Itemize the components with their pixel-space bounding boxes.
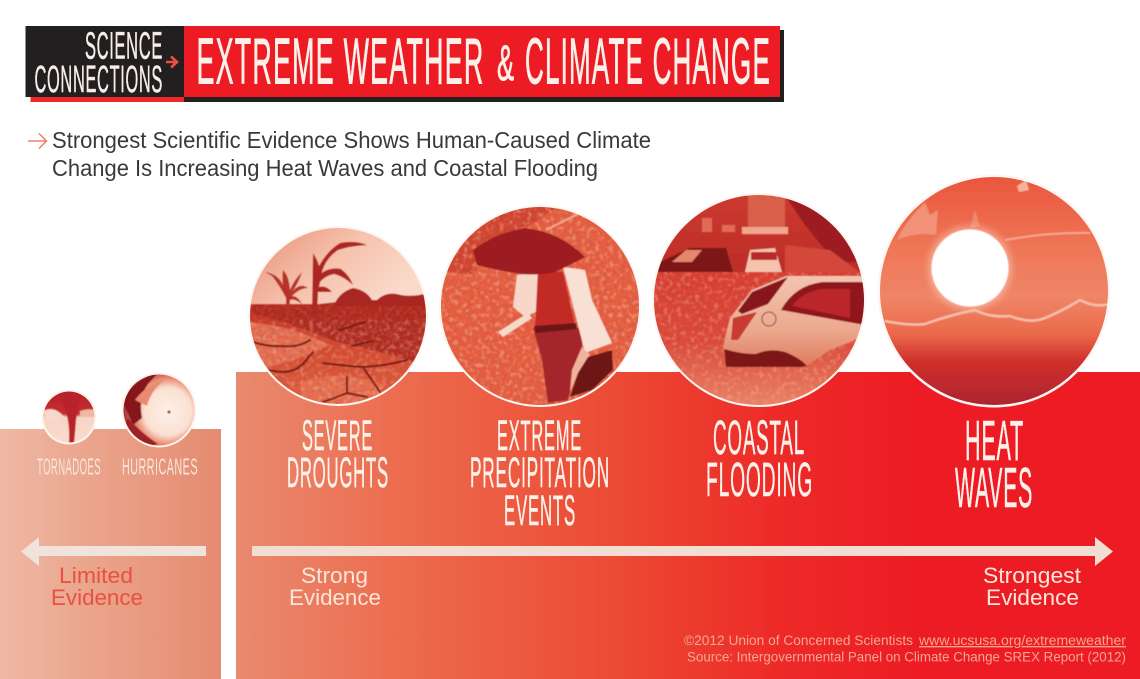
title banner: SCIENCE bbox=[85, 26, 163, 68]
subtitle text: Strongest Scientific Evidence Shows Human-Caused Climate bbox=[52, 127, 651, 153]
car body bbox=[723, 276, 865, 366]
pale cracked earth bbox=[248, 322, 330, 372]
newspaper bbox=[498, 313, 532, 337]
text: strong evidence: Evidence bbox=[289, 585, 381, 610]
photo: coastal flooding bbox=[652, 193, 866, 408]
fuel cap bbox=[762, 312, 776, 326]
bag bbox=[570, 350, 613, 397]
text: limited evidence: Limited bbox=[59, 563, 133, 588]
credits bbox=[684, 633, 1127, 664]
black tag bbox=[26, 26, 184, 97]
horizon bushes bbox=[335, 288, 428, 306]
ground bbox=[250, 303, 414, 404]
credits: www.ucsusa.org/extremeweather bbox=[918, 633, 1127, 648]
sky bbox=[251, 228, 424, 305]
credits: ©2012 Union of Concerned Scientists bbox=[684, 633, 913, 648]
infographic: PRECIPITATION bbox=[470, 450, 610, 497]
label: coastal flooding bbox=[706, 412, 813, 507]
main title: & bbox=[497, 35, 514, 91]
photo: hurricane bbox=[122, 372, 196, 448]
rear window bbox=[738, 277, 788, 314]
photo: extreme precipitation bbox=[439, 205, 641, 408]
tag arrow bbox=[166, 56, 177, 68]
label: extreme precipitation events: EVENTS bbox=[504, 488, 576, 535]
jacket right bbox=[563, 267, 612, 353]
dark upper bank bbox=[448, 207, 555, 275]
text: limited evidence: Evidence bbox=[51, 585, 143, 610]
subtitle text: Change Is Increasing Heat Waves and Coastal Flooding bbox=[52, 155, 598, 181]
label: heat waves bbox=[955, 409, 1033, 520]
tall plant bbox=[312, 242, 367, 315]
umbrella bbox=[473, 228, 585, 274]
text: strongest evidence: Strongest bbox=[983, 563, 1081, 588]
belt bbox=[534, 323, 577, 333]
infographic: SEVERE bbox=[302, 413, 373, 460]
shirt and left sleeve bbox=[513, 272, 540, 317]
infographic: CLIMATE CHANGE bbox=[525, 24, 771, 98]
panel: limited evidence bbox=[0, 429, 221, 679]
infographic: HURRICANES bbox=[122, 454, 198, 480]
text: strong evidence bbox=[289, 563, 381, 610]
text: strong evidence: Strong bbox=[301, 563, 368, 588]
cracks bbox=[253, 322, 407, 402]
white van bbox=[745, 248, 782, 272]
side window bbox=[781, 282, 865, 325]
water bbox=[653, 272, 865, 408]
infographic: COASTAL bbox=[713, 412, 805, 465]
clouds bbox=[897, 202, 938, 240]
title banner bbox=[26, 24, 784, 102]
vest bbox=[535, 270, 575, 328]
bumper bbox=[724, 349, 807, 367]
infographic: FLOODING bbox=[706, 454, 813, 507]
text: strongest evidence: Evidence bbox=[986, 585, 1079, 610]
tag text bbox=[34, 26, 163, 101]
label: extreme precipitation events bbox=[470, 413, 610, 535]
label: extreme precipitation events: EXTREME bbox=[497, 413, 582, 460]
arrow: limited evidence bbox=[21, 537, 206, 566]
subtitle bbox=[28, 127, 651, 181]
panel: strong evidence bbox=[236, 372, 1140, 679]
arrow: strength of evidence bbox=[252, 537, 1113, 566]
credits: Source: Intergovernmental Panel on Climate Change SREX Report (2012) bbox=[687, 650, 1126, 664]
photo: heat waves bbox=[878, 174, 1110, 408]
main title: EXTREME WEATHER bbox=[196, 24, 484, 98]
infographic: DROUGHTS bbox=[287, 450, 389, 497]
jacket lower bbox=[570, 347, 590, 392]
sun bbox=[922, 220, 1018, 316]
photo: tornado bbox=[40, 390, 98, 444]
dark far field bbox=[250, 302, 426, 362]
subtitle text bbox=[52, 127, 651, 181]
short plant bbox=[265, 270, 308, 313]
city background bbox=[653, 194, 865, 276]
infographic: HEAT bbox=[965, 409, 1024, 473]
label: severe droughts bbox=[287, 413, 389, 497]
taillight bbox=[731, 312, 757, 340]
trousers bbox=[533, 328, 582, 403]
title banner: CONNECTIONS bbox=[34, 59, 163, 101]
subtitle arrow bbox=[28, 134, 46, 148]
dark van bbox=[658, 248, 733, 272]
photo: severe droughts bbox=[248, 226, 430, 408]
pole line bbox=[546, 214, 578, 230]
red title bar bbox=[184, 26, 780, 97]
infographic: TORNADOES bbox=[37, 454, 101, 480]
text: strongest evidence bbox=[983, 563, 1081, 610]
text: limited evidence bbox=[51, 563, 143, 610]
